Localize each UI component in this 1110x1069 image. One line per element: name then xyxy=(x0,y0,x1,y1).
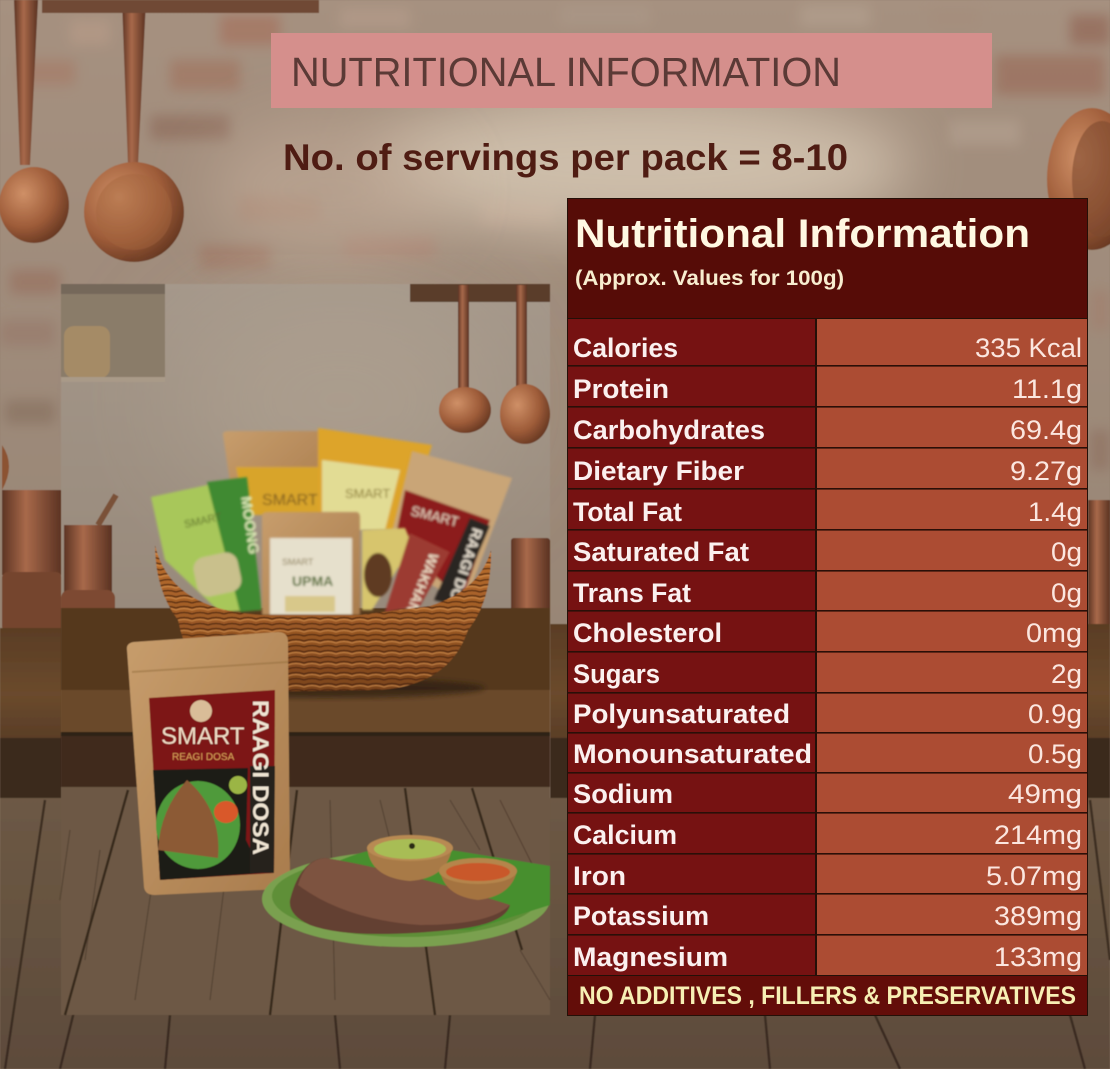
nutrient labels: Iron xyxy=(573,861,626,891)
nutrient values: 0g xyxy=(1051,578,1082,608)
footer strip: NO ADDITIVES , FILLERS & PRESERVATIVES xyxy=(579,982,1076,1010)
nutrient labels: Monounsaturated xyxy=(573,739,812,769)
nutrient values: 2g xyxy=(1051,659,1082,689)
nutrient labels: Polyunsaturated xyxy=(573,699,790,729)
wall niche with jar xyxy=(61,284,165,382)
pouch label xyxy=(149,690,275,880)
nutrition table xyxy=(567,198,1088,1016)
title banner xyxy=(271,33,992,108)
nutrient labels: Dietary Fiber xyxy=(573,456,745,486)
nutrient labels: Calories xyxy=(573,333,678,363)
nutrient labels: Saturated Fat xyxy=(573,537,749,567)
nutrient labels: Sodium xyxy=(573,779,673,809)
pouch brand: SMART xyxy=(161,723,245,750)
upma pouch: UPMA xyxy=(292,573,333,589)
right side pot and table xyxy=(1088,500,1110,625)
back pouches: SMART xyxy=(345,486,390,501)
nutrient values: 0g xyxy=(1051,537,1082,567)
nutrient labels: Magnesium xyxy=(573,942,728,972)
copper pots xyxy=(61,495,550,640)
hanging rail and ladles xyxy=(410,284,550,444)
brick wall xyxy=(0,5,1110,470)
nutrient values: 389mg xyxy=(994,901,1082,931)
back pouches: SMART xyxy=(262,492,318,509)
back pouches xyxy=(223,428,432,530)
table header: (Approx. Values for 100g) xyxy=(575,267,844,290)
hanging ladle xyxy=(0,0,69,243)
table header xyxy=(568,199,1087,318)
wooden shelf xyxy=(61,608,550,790)
nutrient values: 0.9g xyxy=(1028,699,1082,729)
green pouch xyxy=(151,477,262,612)
wooden table xyxy=(60,787,550,1015)
nutrient values: 133mg xyxy=(994,942,1082,972)
dosa xyxy=(290,858,510,934)
nutrient values: 11.1g xyxy=(1012,374,1082,404)
title banner: NUTRITIONAL INFORMATION xyxy=(291,49,841,95)
basket shadow xyxy=(165,678,485,698)
nutrient values: 49mg xyxy=(1008,779,1082,809)
nutrient labels: Total Fat xyxy=(573,497,682,527)
pouch label: REAGI DOSA xyxy=(172,752,235,763)
pouch dosa illustration xyxy=(156,776,247,869)
nutrient values: 5.07mg xyxy=(986,861,1082,891)
nutrient labels: Sugars xyxy=(573,659,660,689)
nutrient labels: Carbohydrates xyxy=(573,415,765,445)
nutrient values xyxy=(975,333,1082,972)
nutrient values: 335 Kcal xyxy=(975,333,1082,363)
servings line: No. of servings per pack = 8-10 xyxy=(283,137,848,178)
nutrient labels xyxy=(573,333,812,972)
pouch vertical title: RAAGI DOSA xyxy=(248,700,273,855)
dosa plate xyxy=(262,835,550,947)
nutrient values: 0.5g xyxy=(1028,739,1082,769)
nutrient labels: Cholesterol xyxy=(573,618,722,648)
nutrient values: 1.4g xyxy=(1028,497,1082,527)
left side pots xyxy=(2,490,62,575)
front pouch: Raagi Dosa xyxy=(127,632,290,895)
nutrient labels: Potassium xyxy=(573,901,709,931)
green pouch: SMART xyxy=(183,511,223,531)
upma pouch: SMART xyxy=(282,557,314,567)
product photo panel xyxy=(60,284,550,1015)
nutrient labels: Protein xyxy=(573,374,669,404)
footer strip xyxy=(568,976,1087,1015)
green pouch: MOONG xyxy=(237,495,262,555)
wicker basket xyxy=(155,545,491,692)
row backgrounds xyxy=(568,319,1087,975)
red and yellow pouch: WAKHANA xyxy=(400,551,442,625)
red and yellow pouch xyxy=(362,528,450,625)
nutrient labels: Calcium xyxy=(573,820,677,850)
nutrient values: 0mg xyxy=(1026,618,1082,648)
red chutney bowl xyxy=(439,858,517,900)
wall glow xyxy=(370,95,910,235)
kraft pouch with red label xyxy=(385,451,512,622)
nutrient values: 9.27g xyxy=(1010,456,1082,486)
green chutney bowl xyxy=(367,835,453,881)
kraft pouch with red label: SMART xyxy=(409,502,461,530)
hanging pan xyxy=(42,0,319,262)
table header: Nutritional Information xyxy=(575,212,1030,256)
kraft pouch with red label: RAAGI DOSA xyxy=(440,526,485,622)
nutrient values: 69.4g xyxy=(1010,415,1082,445)
upma pouch xyxy=(262,512,360,615)
pan at right edge xyxy=(1047,108,1110,250)
nutrient labels: Trans Fat xyxy=(573,578,691,608)
nutrient values: 214mg xyxy=(994,820,1082,850)
